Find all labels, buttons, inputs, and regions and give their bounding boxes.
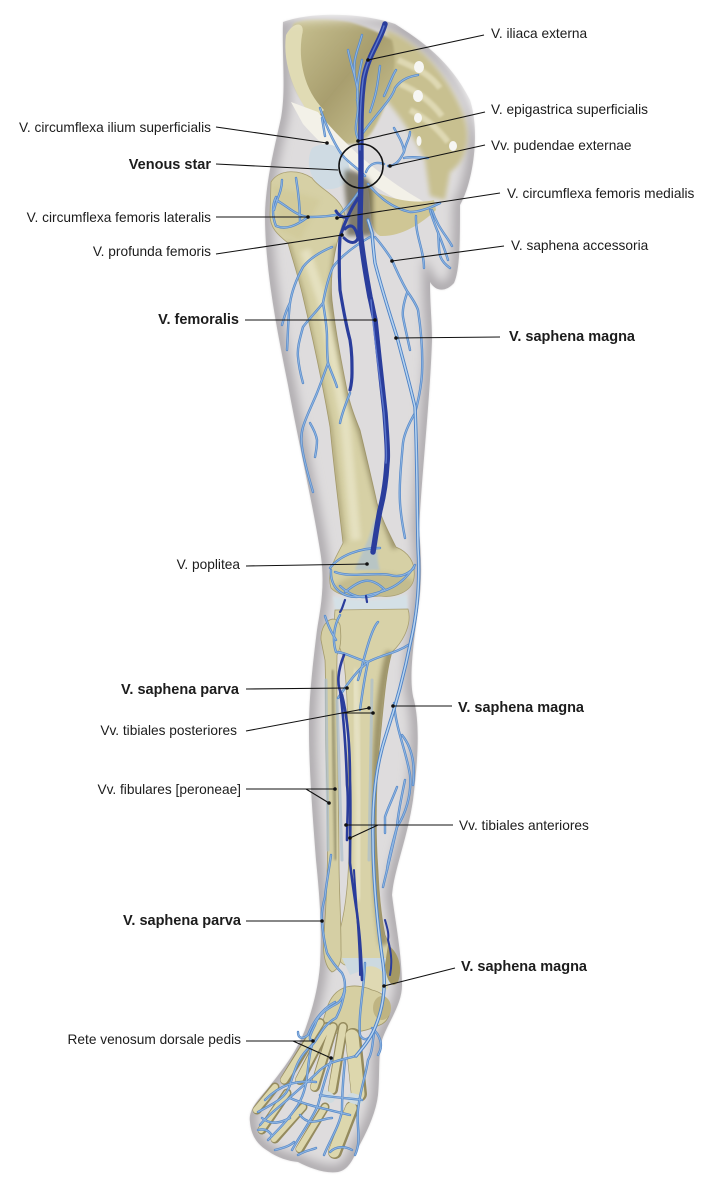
- pelvis bones: [285, 19, 467, 236]
- label: V. saphena magna thigh: [394, 329, 636, 345]
- label: Vv. tibiales posteriores: Vv. tibiales posteriores: [100, 723, 237, 738]
- label: Vv. tibiales anteriores: [344, 818, 589, 840]
- label: Vv. tibiales anteriores: Vv. tibiales anteriores: [459, 818, 589, 833]
- fibula: [321, 619, 341, 972]
- label: V. circumflexa femoris lateralis: [27, 210, 310, 225]
- ilium: [290, 19, 395, 144]
- tibia: [335, 609, 409, 965]
- label: V. epigastrica superficialis: V. epigastrica superficialis: [491, 102, 648, 117]
- label: V. saphena parva lower: [123, 913, 324, 929]
- label: V. saphena magna calf: V. saphena magna: [458, 700, 585, 716]
- femoral vein: [360, 24, 387, 552]
- label: V. femoralis: V. femoralis: [158, 312, 239, 328]
- label: V. saphena magna ankle: [382, 959, 588, 988]
- label: V. epigastrica superficialis: [356, 102, 648, 143]
- label: Vv. fibulares: [97, 782, 337, 805]
- label: V. saphena accessoria: [390, 238, 649, 263]
- label: Vv. pudendae externae: [388, 138, 632, 168]
- body silhouette: [250, 15, 475, 1172]
- label: V. femoralis: [158, 312, 377, 328]
- label: Vv. fibulares: Vv. fibulares [peroneae]: [97, 782, 241, 797]
- venous star circle: [339, 144, 383, 188]
- light blue superficial veins: [258, 35, 452, 1155]
- femoral neck shadow: [344, 170, 373, 236]
- label: V. profunda femoris: V. profunda femoris: [93, 244, 211, 259]
- deep veins dark blue: [336, 24, 391, 980]
- label: V. circumflexa ilium superficialis: [19, 120, 329, 145]
- label: V. saphena magna ankle: V. saphena magna: [461, 959, 588, 975]
- ankle and tarsal bones: [320, 945, 400, 1033]
- label: V. circumflexa femoris medialis: V. circumflexa femoris medialis: [507, 186, 695, 201]
- fade of top and pelvis edge: [270, 0, 520, 180]
- pale popliteal shadow: [355, 520, 380, 570]
- knee joint gap: [333, 594, 408, 610]
- label: Venous star: Venous star: [129, 157, 211, 173]
- label: V. circumflexa ilium superficialis: V. circumflexa ilium superficialis: [19, 120, 211, 135]
- label: V. saphena magna thigh: V. saphena magna: [509, 329, 636, 345]
- label: V. iliaca externa: V. iliaca externa: [491, 26, 588, 41]
- label: V. saphena parva upper: V. saphena parva: [121, 682, 240, 698]
- label: V. profunda femoris: [93, 233, 344, 259]
- label: Rete venosum dorsale pedis: [68, 1032, 333, 1060]
- posterior tibial: [338, 655, 362, 980]
- label: V. circumflexa femoris medialis: [335, 186, 695, 220]
- label: V. saphena parva lower: V. saphena parva: [123, 913, 242, 929]
- label: V. saphena parva upper: [121, 682, 349, 698]
- femur: [270, 170, 414, 600]
- hip joint capsule: [309, 144, 350, 189]
- metatarsals and toe bones: [256, 1023, 359, 1152]
- label: V. iliaca externa: [366, 26, 588, 62]
- label: V. saphena accessoria: V. saphena accessoria: [511, 238, 649, 253]
- label: V. poplitea: V. poplitea: [177, 557, 240, 572]
- pubis: [368, 188, 436, 236]
- sacrum: [386, 30, 467, 200]
- label: Venous star: [129, 157, 338, 173]
- pale deep-vein streaks of lower leg: [326, 680, 372, 860]
- label: Vv. tibiales posteriores: [100, 706, 375, 738]
- label: Vv. pudendae externae: Vv. pudendae externae: [491, 138, 632, 153]
- label: V. circumflexa femoris lateralis: V. circumflexa femoris lateralis: [27, 210, 211, 225]
- profunda femoris: [339, 198, 358, 390]
- label: Rete venosum dorsale pedis: Rete venosum dorsale pedis: [68, 1032, 241, 1047]
- inguinal ligament: [291, 102, 428, 208]
- label: V. poplitea: [177, 557, 369, 572]
- label: V. saphena magna calf: [391, 700, 585, 716]
- sacral foramina: [413, 61, 457, 151]
